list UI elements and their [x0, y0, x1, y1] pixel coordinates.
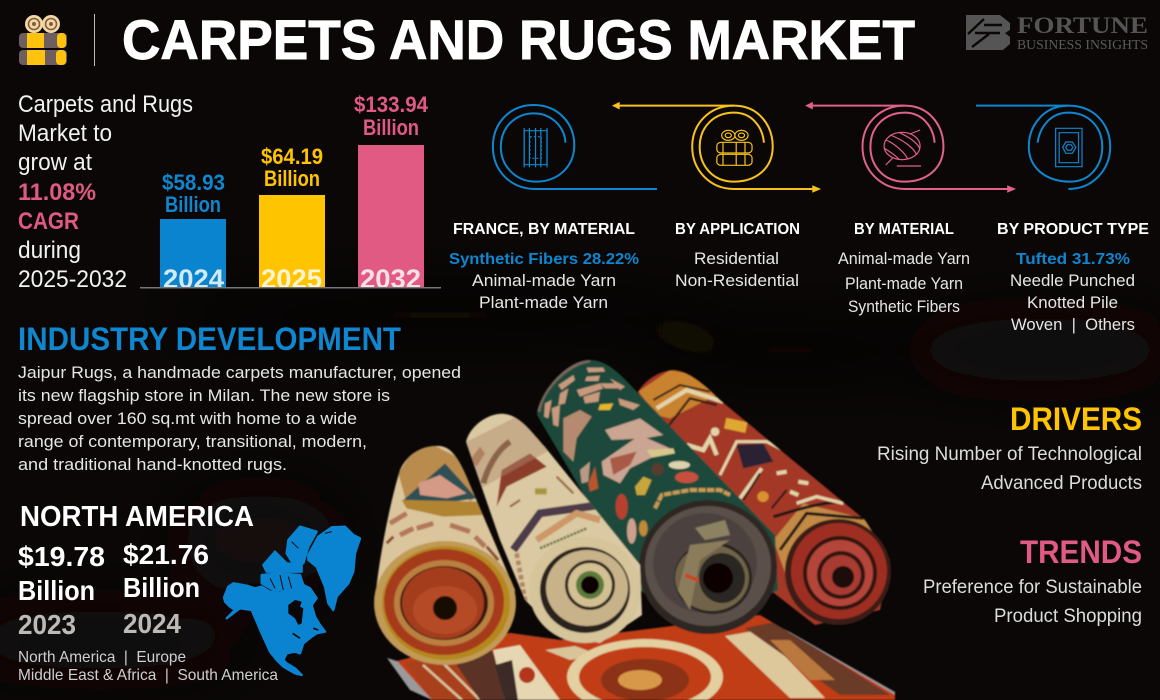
bar: 2025: $64.19	[261, 144, 323, 169]
stat: 2024 value: 2024	[123, 608, 181, 639]
segment: by product type: Tufted 31.73%	[1016, 251, 1130, 268]
logo: Fortune Business Insights: BUSINESS INSIGHTS	[1017, 37, 1148, 52]
text: industry development body: Jaipur Rugs, a handmade carpets manufacturer, opened	[18, 363, 461, 382]
segment: by material: Animal-made Yarn	[838, 249, 970, 268]
segment: by product type: BY PRODUCT TYPE	[997, 221, 1149, 238]
segment: by application: BY APPLICATION	[675, 221, 800, 238]
logo: Fortune Business Insights	[966, 13, 1148, 52]
stat: 2024 value	[123, 539, 209, 639]
bar: 2024: Billion	[165, 192, 221, 217]
segment: by application	[675, 221, 800, 290]
segment: by application: Non-Residential	[675, 271, 799, 290]
segment: France by material: Plant-made Yarn	[479, 293, 608, 312]
rug roll: green	[537, 360, 778, 634]
text: industry development body: and traditional hand-knotted rugs.	[18, 455, 287, 474]
text: CAGR statement	[18, 91, 193, 293]
segment: France by material: Animal-made Yarn	[472, 271, 616, 290]
bar: 2024	[160, 170, 226, 294]
segment: by product type: Knotted Pile	[1027, 293, 1118, 312]
segment connectors and icons	[493, 103, 1110, 192]
icon: yellow spiral with rolls	[613, 103, 820, 192]
text: industry development body: range of contemporary, transitional, modern,	[18, 432, 367, 451]
rug roll: cream	[466, 410, 642, 643]
bar: 2025: 2025	[261, 264, 322, 294]
segment: by material: Plant-made Yarn	[845, 274, 963, 293]
stat: 2023 value: Billion	[18, 575, 95, 606]
heading: North America: NORTH AMERICA	[20, 501, 254, 533]
panel: drivers: Rising Number of Technological	[877, 444, 1142, 465]
stat: 2023 value: $19.78	[18, 541, 105, 572]
panel: trends: TRENDS	[1020, 534, 1142, 570]
stat: 2024 value: Billion	[123, 572, 200, 603]
panel: drivers	[877, 401, 1142, 494]
segment: by material: Synthetic Fibers	[848, 297, 960, 316]
text: CAGR statement: 2025-2032	[18, 266, 127, 293]
text: industry development body	[18, 363, 461, 474]
bar: 2032: 2032	[360, 264, 421, 294]
rug roll: red	[638, 370, 891, 625]
text: industry development body: its new flagship store in Milan. The new store is	[18, 386, 390, 405]
map: North America	[224, 527, 360, 675]
bar: 2032: $133.94	[354, 92, 429, 117]
text: regions list	[18, 649, 278, 684]
text: CAGR statement: Market to	[18, 120, 112, 147]
flat rug	[380, 610, 900, 700]
icon: blue spiral with patterned rug	[976, 106, 1110, 189]
text: industry development body: spread over 160 sq.mt with home to a wide	[18, 409, 357, 428]
stat: 2023 value: 2023	[18, 609, 76, 640]
segment: France by material	[449, 221, 639, 312]
bar chart: market size	[140, 92, 441, 294]
stat: 2023 value	[18, 541, 105, 640]
icon: blue spiral with rug	[493, 105, 657, 189]
bar: 2024: 2024	[163, 264, 224, 294]
panel: drivers: Advanced Products	[981, 473, 1142, 494]
title: CARPETS AND RUGS MARKET	[122, 8, 915, 71]
icon: pink spiral with yarn ball	[806, 103, 1015, 192]
panel: trends: Product Shopping	[994, 606, 1142, 627]
bar: 2025	[259, 144, 325, 294]
bar: 2032: Billion	[363, 115, 419, 140]
segment: by material	[838, 221, 970, 316]
segment: France by material: FRANCE, BY MATERIAL	[453, 221, 635, 238]
text: CAGR statement: during	[18, 237, 81, 264]
text: regions list: Middle East & Africa | South America	[18, 667, 278, 684]
panel: trends	[923, 534, 1142, 627]
icon: rolled carpets logo	[19, 15, 67, 65]
illustration: rolled rugs	[374, 360, 900, 700]
text: CAGR statement: CAGR	[18, 208, 79, 235]
segment: by product type: Needle Punched	[1010, 271, 1135, 290]
logo: Fortune Business Insights: FORTUNE	[1017, 13, 1148, 38]
segment: by material: BY MATERIAL	[854, 221, 954, 238]
bar: 2024: $58.93	[162, 170, 225, 195]
text: CAGR statement: grow at	[18, 149, 92, 176]
heading: industry development: INDUSTRY DEVELOPMENT	[18, 321, 401, 357]
text: CAGR statement: 11.08%	[18, 179, 96, 206]
bar: 2025: Billion	[264, 166, 320, 191]
segment: by product type	[997, 221, 1149, 334]
segment: by product type: Woven | Others	[1011, 315, 1135, 334]
bar: 2032	[354, 92, 429, 294]
segment: by application: Residential	[694, 249, 779, 268]
segment: France by material: Synthetic Fibers 28.22%	[449, 251, 639, 268]
stat: 2024 value: $21.76	[123, 539, 209, 570]
rug roll: orange	[374, 445, 516, 665]
panel: drivers: DRIVERS	[1010, 401, 1142, 437]
panel: trends: Preference for Sustainable	[923, 577, 1142, 598]
text: regions list: North America | Europe	[18, 649, 186, 666]
text: CAGR statement: Carpets and Rugs	[18, 91, 193, 118]
